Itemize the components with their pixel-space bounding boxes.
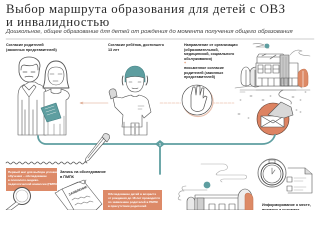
label: referral: + xyxy=(184,61,186,65)
label: informing: Информирование о месте, xyxy=(262,203,311,207)
dotted ground and path to the envelope xyxy=(238,92,306,118)
icon: envelope in orange circle xyxy=(257,102,293,135)
icon: lower building xyxy=(187,189,253,210)
title: и инвалидностью xyxy=(6,15,110,29)
text: first step note: Первый шаг для выбора условий xyxy=(8,170,58,174)
label: child consent: Согласие ребёнка, достигшего xyxy=(108,43,164,47)
decorative clouds xyxy=(201,164,247,182)
teal cloud dot xyxy=(178,182,210,200)
label: referral: (образовательной, xyxy=(184,48,219,52)
text: first step note xyxy=(8,170,58,186)
orange note: examination xyxy=(103,190,162,210)
text: examination note: по заявлению родителей в ПМПК xyxy=(108,200,158,204)
icon: magnifier xyxy=(6,188,30,210)
text: examination note: от рождения до 18 лет проводится xyxy=(108,196,160,200)
timeline node: 1 xyxy=(159,142,162,146)
text: first step note: в психолого-медико- xyxy=(8,178,39,182)
label: referral: представителей) xyxy=(184,75,215,79)
label: informing xyxy=(262,203,311,210)
label: referral: Направление от организации xyxy=(184,43,238,47)
title: Выбор маршрута образования для детей с ОВЗ xyxy=(6,2,286,16)
icon: pen xyxy=(85,134,110,162)
wavy line xyxy=(6,162,87,164)
label: referral xyxy=(184,43,238,79)
teal timeline xyxy=(38,135,275,144)
icon: teal document held xyxy=(41,103,61,122)
orange note: first step xyxy=(6,168,57,191)
icon: mother xyxy=(43,61,69,135)
icon: father xyxy=(18,57,46,135)
text: application: ЗАЯВЛЕНИЕ xyxy=(68,185,88,197)
icon: application document xyxy=(55,180,102,210)
timeline node xyxy=(155,140,165,148)
label: appointment xyxy=(60,170,106,179)
arrow: thin to the hand icon xyxy=(160,102,234,104)
label: parents consent: Согласие родителей xyxy=(6,43,44,47)
label: referral: родителей (законных xyxy=(184,71,223,75)
label: child consent: 13 лет xyxy=(108,48,119,52)
text: first step note: педагогической комиссии (ПМПК) xyxy=(8,182,58,186)
icon: child xyxy=(109,66,151,135)
text: examination note: Обследование детей в возрасте xyxy=(108,192,156,196)
text: first step note: обучения – обследование xyxy=(8,174,47,178)
icon: clock xyxy=(258,159,286,187)
subtitle: Дошкольное, общее образование для детей от рождения до момента получения общего образования xyxy=(6,28,293,34)
label: referral: обслуживания) xyxy=(184,57,212,61)
divider xyxy=(6,38,314,40)
text: examination note: в присутствии родителей xyxy=(108,204,146,208)
label: appointment: в ПМПК xyxy=(60,175,74,179)
title xyxy=(6,2,286,29)
text: examination note xyxy=(108,192,160,208)
arrow: thin to the child xyxy=(80,102,108,104)
icon: building xyxy=(235,44,310,92)
label: referral: письменное согласие xyxy=(184,66,224,70)
label: parents consent: (законных представителей) xyxy=(6,48,57,52)
label: referral: медицинской, социального xyxy=(184,52,234,56)
icon: hand in circle xyxy=(182,85,213,116)
icon: checklist xyxy=(287,168,312,193)
label: parents consent xyxy=(6,43,57,52)
label: child consent xyxy=(108,43,164,52)
label: appointment: Запись на обследование xyxy=(60,170,106,174)
